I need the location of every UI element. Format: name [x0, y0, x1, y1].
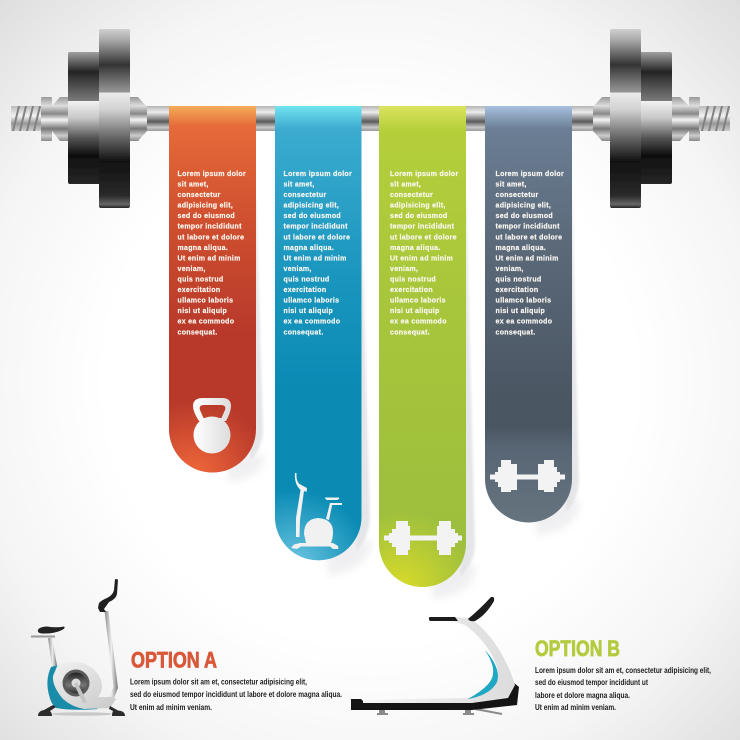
- left cone: [52, 97, 68, 141]
- ribbon shadows: side wedges: [250, 200, 579, 576]
- ribbon text: blue: tempor incididunt: [284, 224, 348, 231]
- ribbon text: red: veniam,: [178, 266, 206, 273]
- ribbon text: blue: sit amet,: [284, 182, 315, 188]
- treadmill console: [468, 597, 494, 621]
- ribbon text: green: quis nostrud: [390, 276, 436, 284]
- exercise bike illustration: [31, 579, 125, 716]
- ribbon text: blue: magna aliqua.: [284, 245, 334, 252]
- ribbon text: red: sit amet,: [178, 182, 209, 188]
- option a: [130, 648, 342, 712]
- icon: exercise bike: [291, 473, 342, 549]
- bar: [40, 106, 700, 131]
- bike handlebar: [98, 579, 118, 612]
- ribbon text: blue: ex ea commodo: [284, 319, 340, 326]
- option b text: sed do eiusmod tempor incididunt ut: [535, 677, 648, 687]
- ribbon text: green: sit amet,: [390, 182, 421, 188]
- option a text: [130, 676, 342, 712]
- option a text: Ut enim ad minim veniam.: [130, 702, 212, 712]
- bike seat bar: [31, 636, 55, 638]
- ribbon shadows: under glow: [226, 455, 580, 599]
- ribbon text: red: consectetur: [178, 192, 220, 199]
- ribbon text: green: tempor incididunt: [390, 224, 455, 231]
- ribbon: gray: [485, 106, 572, 522]
- ribbon text: blue: consequat.: [284, 329, 323, 336]
- ribbon text: gray: sit amet,: [496, 182, 527, 188]
- ribbon text: green: ullamco laboris: [390, 298, 446, 305]
- ribbon text: gray: ullamco laboris: [496, 298, 551, 305]
- ribbon text: gray: quis nostrud: [496, 276, 542, 284]
- ribbon text: blue: quis nostrud: [284, 276, 330, 284]
- ribbon: green: [379, 106, 466, 587]
- ribbon text: blue: ut labore et dolore: [284, 234, 350, 241]
- option a heading: OPTION A: [131, 648, 217, 672]
- ribbon text: gray: consequat.: [496, 329, 535, 336]
- treadmill upright: [363, 617, 515, 703]
- ribbon text: red: quis nostrud: [178, 276, 224, 284]
- ribbon text: blue: sed do eiusmod: [284, 213, 341, 220]
- treadmill feet: [377, 708, 502, 715]
- ribbon text: red: exercitation: [178, 287, 220, 294]
- ribbon text: red: ullamco laboris: [178, 298, 233, 305]
- ribbon text: red: ut labore et dolore: [178, 234, 244, 241]
- bike seat: [38, 626, 65, 634]
- right large plate: [610, 29, 641, 208]
- ribbon text: green: ut labore et dolore: [390, 234, 457, 241]
- treadmill illustration: [351, 597, 519, 715]
- ribbon text: red: tempor incididunt: [178, 224, 242, 231]
- ribbon text: gray: nisi ut aliquip: [496, 308, 545, 315]
- ribbon text: gray: sed do eiusmod: [496, 213, 553, 220]
- ribbon text: gray: ex ea commodo: [496, 319, 552, 326]
- left inner cone: [130, 97, 147, 141]
- ribbon text: blue: Ut enim ad minim: [284, 255, 347, 262]
- ribbon text: red: nisi ut aliquip: [178, 308, 227, 315]
- right collar: [689, 97, 700, 141]
- ribbon text: gray: magna aliqua.: [496, 245, 546, 252]
- ribbon text: green: sed do eiusmod: [390, 213, 448, 220]
- left small plate: [68, 52, 101, 184]
- ribbon text: blue: ullamco laboris: [284, 298, 339, 305]
- ribbon text: green: magna aliqua.: [390, 245, 441, 252]
- ribbon text: green: exercitation: [390, 287, 433, 294]
- ribbon: blue: [275, 106, 362, 560]
- ribbon text: blue: consectetur: [284, 192, 326, 199]
- ribbon text: red: adipisicing elit,: [178, 203, 233, 210]
- ribbon text: red: sed do eiusmod: [178, 213, 235, 220]
- bike seat post: [48, 638, 57, 667]
- bike handle stem: [104, 611, 118, 698]
- ribbon text: green: veniam,: [390, 266, 418, 273]
- right thread: [699, 106, 730, 131]
- ribbon text: gray: adipisicing elit,: [496, 203, 551, 210]
- icon: dumbbell: [490, 460, 565, 492]
- option a text: sed do eiusmod tempor incididunt ut labore et dolore magna aliqua.: [130, 689, 342, 699]
- treadmill base: [351, 682, 519, 710]
- left weights: [11, 29, 147, 208]
- bike white body: [53, 662, 116, 709]
- ribbon text: red: Ut enim ad minim: [178, 255, 241, 262]
- ribbon text: gray: veniam,: [496, 266, 524, 273]
- ribbon text: gray: consectetur: [496, 192, 538, 199]
- bike blue shell: [47, 665, 98, 710]
- ribbon text: green: consequat.: [390, 329, 430, 336]
- icon: kettlebell: [193, 398, 231, 454]
- option b heading: OPTION B: [535, 636, 620, 661]
- option b text: [535, 665, 711, 712]
- bike feet: [38, 705, 125, 716]
- ribbon: red: [169, 106, 256, 472]
- left thread: [11, 106, 42, 131]
- option a text: Lorem ipsum dolor sit am et, consectetur adipisicing elit,: [130, 676, 307, 686]
- ribbon text: blue: Lorem ipsum dolor: [284, 171, 352, 178]
- ribbon text: blue: adipisicing elit,: [284, 203, 339, 210]
- right small plate: [639, 52, 672, 184]
- right cone: [672, 97, 689, 141]
- ribbon text: red: magna aliqua.: [178, 245, 228, 252]
- ribbon text: blue: veniam,: [284, 266, 312, 273]
- icon: barbell: [384, 521, 462, 555]
- ribbon text: red: Lorem ipsum dolor: [178, 171, 246, 178]
- treadmill handle: [429, 617, 458, 621]
- right weights: [593, 29, 730, 208]
- barbell: [11, 29, 730, 208]
- option b text: labore et dolore magna aliqua.: [535, 690, 630, 700]
- bike flywheel: [62, 670, 90, 703]
- ribbon text: green: adipisicing elit,: [390, 203, 446, 210]
- option b text: Ut enim ad minim veniam.: [535, 702, 616, 712]
- ribbon text: green: ex ea commodo: [390, 319, 447, 326]
- ribbon text: green: consectetur: [390, 192, 433, 199]
- ribbon text: blue: nisi ut aliquip: [284, 308, 333, 315]
- ribbon text: gray: ut labore et dolore: [496, 234, 562, 241]
- right inner cone: [593, 97, 610, 141]
- option b: [535, 636, 711, 712]
- ribbon text: gray: tempor incididunt: [496, 224, 560, 231]
- ribbon text: red: consequat.: [178, 329, 217, 336]
- floor shadow: [52, 712, 112, 716]
- ribbon text: gray: Ut enim ad minim: [496, 255, 559, 262]
- left collar: [41, 97, 52, 141]
- ribbon text: green: Lorem ipsum dolor: [390, 171, 458, 178]
- ribbon text: red: ex ea commodo: [178, 319, 234, 326]
- ribbon text: green: Ut enim ad minim: [390, 255, 453, 262]
- ribbon text: gray: Lorem ipsum dolor: [496, 171, 564, 178]
- left large plate: [99, 29, 130, 208]
- ribbon text: green: nisi ut aliquip: [390, 308, 440, 315]
- ribbon text: gray: exercitation: [496, 287, 538, 294]
- treadmill accent: [468, 650, 498, 699]
- ribbon text: blue: exercitation: [284, 287, 326, 294]
